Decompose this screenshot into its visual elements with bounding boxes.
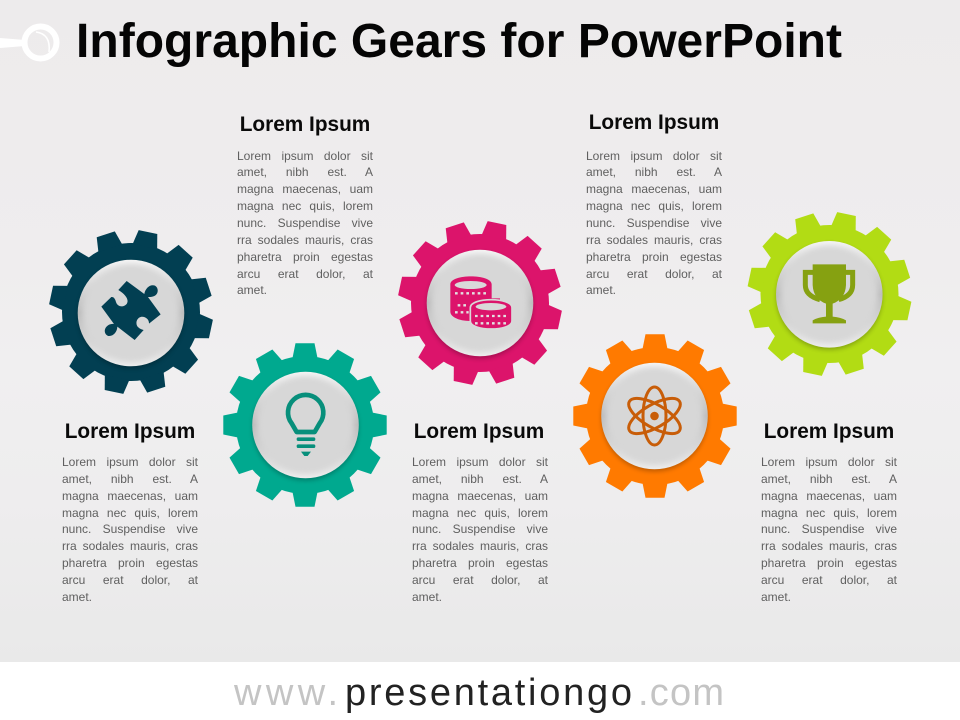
text block: column 5: magna nec quis, lorem [761, 506, 897, 520]
text block: column 4: pharetra proin egestas [586, 250, 722, 264]
text block: column 2: magna maecenas, uam [237, 182, 373, 196]
heading: column 1: Lorem Ipsum [65, 420, 195, 442]
text block: column 3: rra sodales mauris, cras [412, 539, 548, 553]
text block: column 3: arcu erat dolor, at [412, 573, 548, 587]
text block: column 1: magna maecenas, uam [62, 489, 198, 503]
heading: column 2: Lorem Ipsum [240, 113, 370, 136]
text block: column 2 [237, 148, 373, 297]
text block: column 5: amet, nibh est. A [761, 472, 897, 486]
text block: column 4: amet, nibh est. A [586, 165, 722, 179]
text block: column 2: magna nec quis, lorem [237, 199, 373, 213]
gear 2: teal with bulb [223, 343, 387, 507]
gear 4: orange with atom [573, 334, 737, 498]
text block: column 5: rra sodales mauris, cras [761, 539, 897, 553]
icon: light bulb [288, 395, 323, 456]
text block: column 2: arcu erat dolor, at [237, 267, 373, 281]
text block: column 4: rra sodales mauris, cras [586, 233, 722, 247]
title: Infographic Gears for PowerPoint [76, 15, 842, 68]
text block: column 1: rra sodales mauris, cras [62, 539, 198, 553]
text block: column 3: magna nec quis, lorem [412, 506, 548, 520]
gear shape magenta [383, 206, 577, 400]
text block: column 1: nunc. Suspendise vive [62, 522, 198, 536]
text block: column 5: amet. [761, 590, 791, 604]
text block: column 4: nunc. Suspendise vive [586, 216, 722, 230]
button lime [776, 241, 883, 350]
text block: column 1: pharetra proin egestas [62, 556, 198, 570]
gear shape teal [223, 343, 387, 507]
text block: column 5: magna maecenas, uam [761, 489, 897, 503]
gear 3: magenta with coins [383, 206, 577, 400]
logo: ring with tail [0, 26, 56, 58]
text block: column 4: arcu erat dolor, at [586, 267, 722, 281]
text block: column 4: Lorem ipsum dolor sit [586, 148, 722, 162]
button navy [78, 260, 184, 368]
button orange [601, 363, 708, 472]
text block: column 2: Lorem ipsum dolor sit [237, 148, 373, 162]
text block: column 1: amet, nibh est. A [62, 472, 198, 486]
text block: column 5: Lorem ipsum dolor sit [761, 455, 897, 469]
heading: column 4: Lorem Ipsum [589, 111, 719, 134]
text block: column 2: amet. [237, 283, 267, 297]
gear 1: navy with puzzle [34, 215, 228, 409]
text block: column 3: Lorem ipsum dolor sit [412, 455, 548, 469]
text block: column 5: pharetra proin egestas [761, 556, 897, 570]
text block: column 5 [761, 455, 897, 604]
heading: column 5: Lorem Ipsum [764, 420, 894, 442]
text block: column 3: nunc. Suspendise vive [412, 522, 548, 536]
text block: column 1: magna nec quis, lorem [62, 506, 198, 520]
text block: column 3: magna maecenas, uam [412, 489, 548, 503]
button magenta [427, 250, 533, 358]
text block: column 2: nunc. Suspendise vive [237, 216, 373, 230]
icon: puzzle piece [101, 281, 161, 340]
text block: column 1: arcu erat dolor, at [62, 573, 198, 587]
gear shape lime [733, 197, 926, 391]
icon: trophy [805, 264, 853, 323]
text block: column 4: magna nec quis, lorem [586, 199, 722, 213]
icon: atom [624, 387, 685, 445]
footer band [0, 662, 960, 720]
text block: column 4 [586, 148, 722, 297]
gear 5: lime with trophy [733, 197, 926, 391]
text block: column 4: amet. [586, 283, 616, 297]
footer url [233, 672, 724, 714]
text block: column 2: rra sodales mauris, cras [237, 233, 373, 247]
heading: column 3: Lorem Ipsum [414, 420, 544, 442]
text block: column 1: Lorem ipsum dolor sit [62, 455, 198, 469]
icon: coins [450, 276, 512, 329]
text block: column 1: amet. [62, 590, 92, 604]
text block: column 4: magna maecenas, uam [586, 182, 722, 196]
footer url: www. [233, 672, 338, 714]
text block: column 5: arcu erat dolor, at [761, 573, 897, 587]
text block: column 3 [412, 455, 548, 604]
text block: column 3: pharetra proin egestas [412, 556, 548, 570]
text block: column 1 [62, 455, 198, 604]
text block: column 3: amet, nibh est. A [412, 472, 548, 486]
footer url: presentationgo [345, 672, 632, 714]
gear shape orange [573, 334, 737, 498]
text block: column 2: amet, nibh est. A [237, 165, 373, 179]
button teal [252, 372, 359, 480]
text block: column 2: pharetra proin egestas [237, 250, 373, 264]
text block: column 3: amet. [412, 590, 442, 604]
gear shape navy [34, 215, 228, 409]
footer url: .com [638, 672, 724, 714]
text block: column 5: nunc. Suspendise vive [761, 522, 897, 536]
